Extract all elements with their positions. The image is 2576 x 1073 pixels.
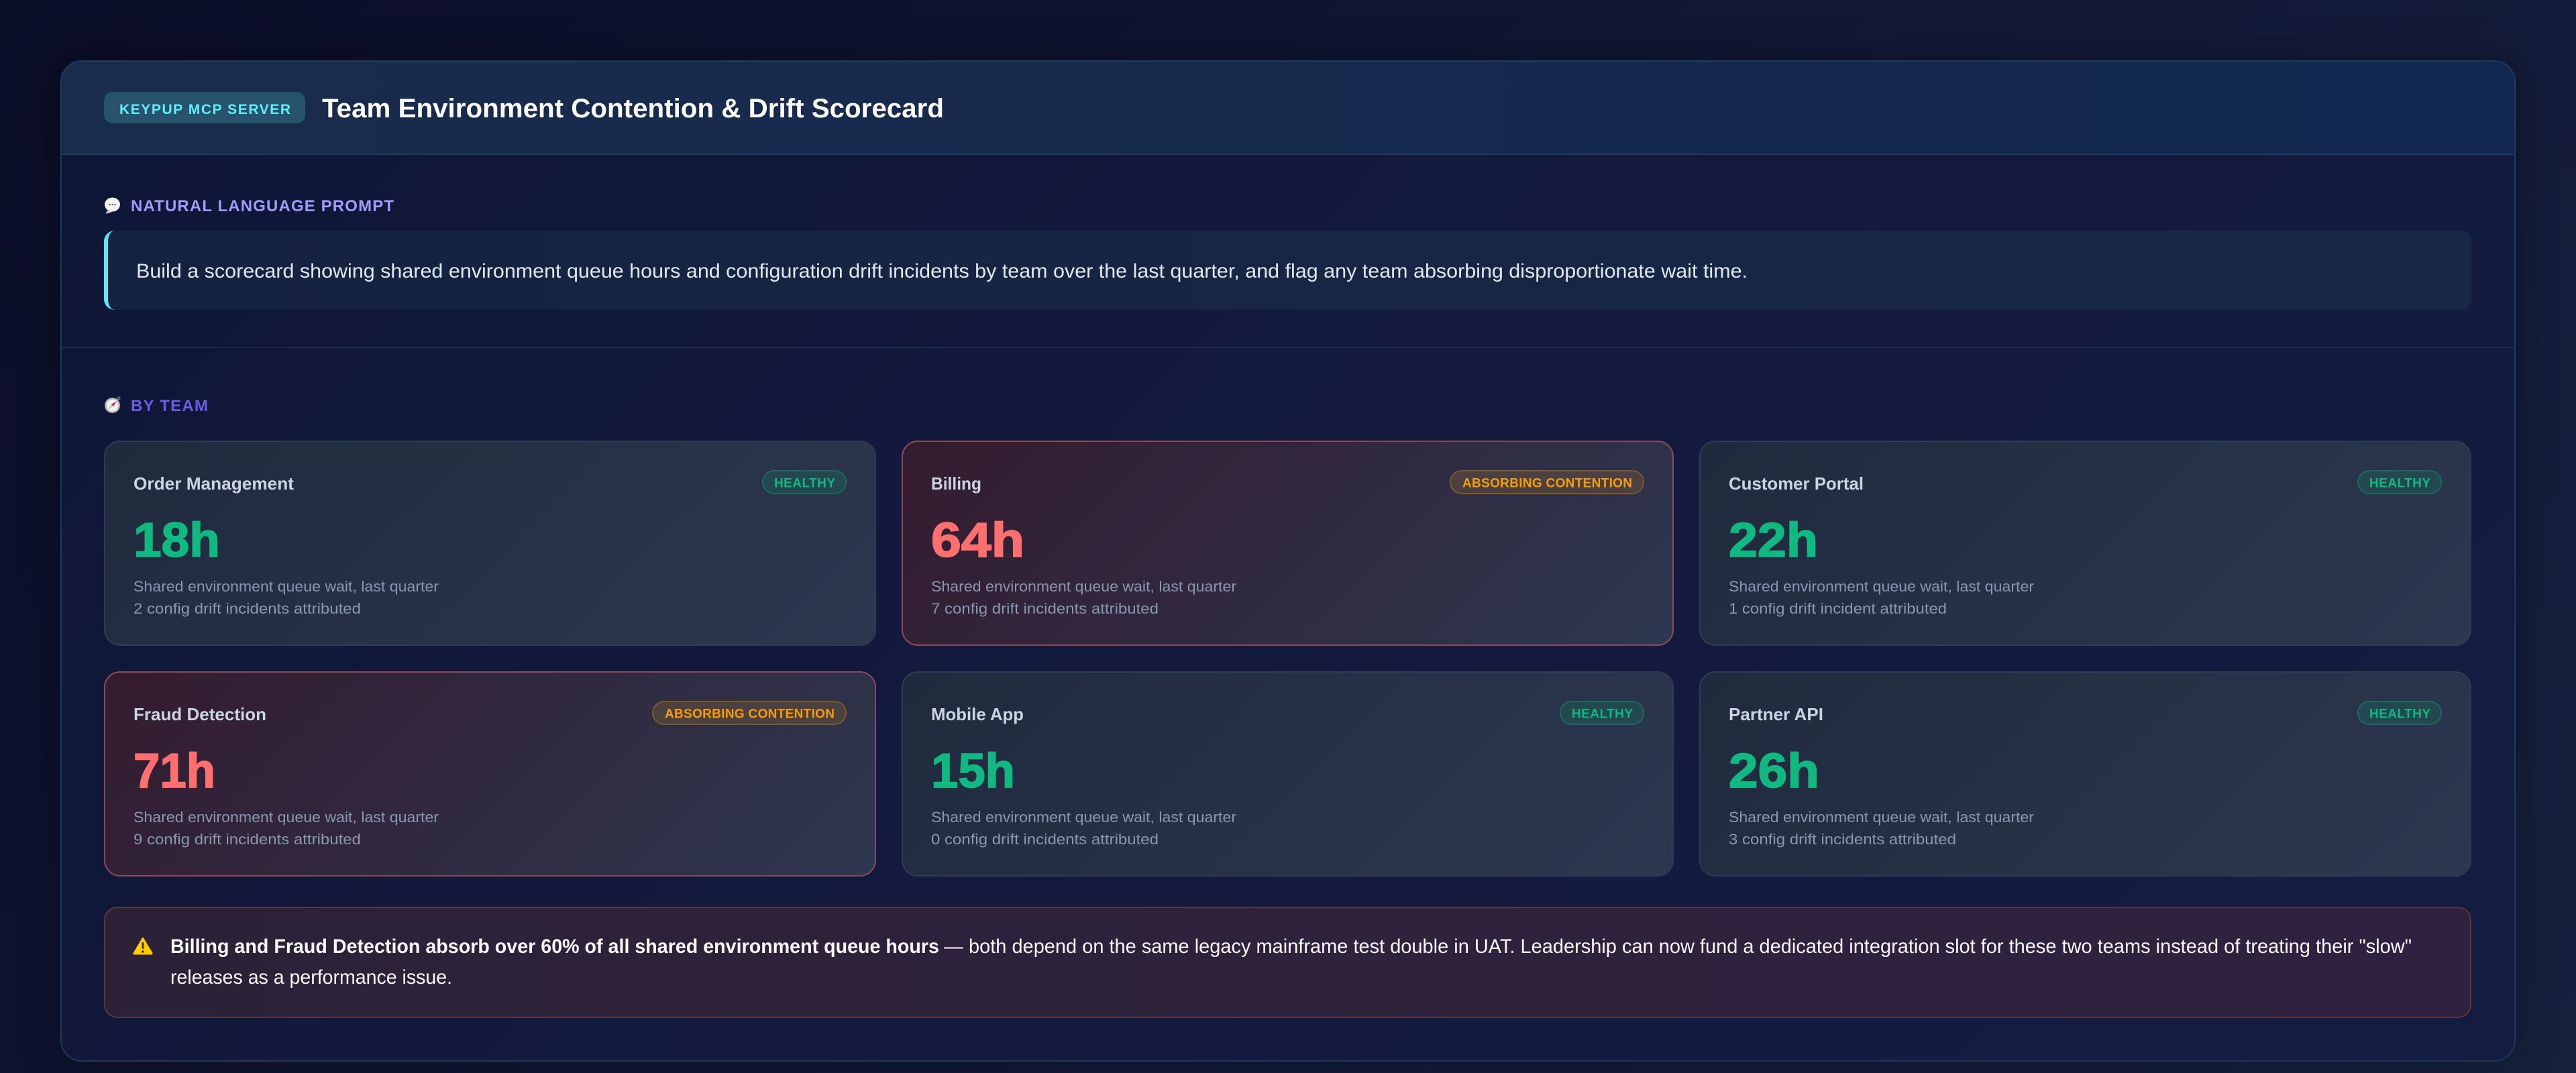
description: Shared environment queue wait, last quarter bbox=[1729, 809, 2034, 826]
description bbox=[133, 809, 439, 848]
team name: Fraud Detection bbox=[133, 704, 266, 724]
description: 2 config drift incidents attributed bbox=[133, 600, 361, 617]
status badge: ABSORBING CONTENTION bbox=[1462, 476, 1632, 491]
card: Fraud Detection bbox=[104, 671, 876, 877]
section label: natural language prompt bbox=[105, 197, 394, 215]
section label: by team bbox=[105, 397, 208, 415]
description bbox=[931, 809, 1236, 848]
card: Customer Portal bbox=[1699, 441, 2471, 646]
queue hours value: 71h bbox=[133, 744, 215, 798]
description: Shared environment queue wait, last quarter bbox=[931, 578, 1236, 595]
title: Team Environment Contention & Drift Scorecard bbox=[322, 94, 944, 123]
description bbox=[931, 578, 1236, 617]
status badge bbox=[653, 701, 846, 724]
status badge bbox=[1450, 471, 1644, 494]
prompt sentence: Build a scorecard showing shared environment queue hours and configuration drift incidents by team over the last quarter, and flag any team absorbing disproportionate wait time. bbox=[136, 260, 1748, 282]
team name: Partner API bbox=[1729, 704, 1823, 724]
queue hours value: 15h bbox=[931, 744, 1015, 798]
status badge: HEALTHY bbox=[774, 476, 835, 491]
team name: Billing bbox=[931, 473, 981, 494]
callout: insight bbox=[104, 907, 2471, 1018]
description bbox=[133, 578, 439, 617]
status badge: HEALTHY bbox=[1572, 707, 1633, 722]
panel: header bbox=[62, 62, 2514, 155]
queue hours value: 64h bbox=[931, 514, 1024, 567]
callout text: Billing and Fraud Detection absorb over 60% of all shared environment queue hours bbox=[170, 936, 939, 958]
panel: prompt text bbox=[104, 231, 2471, 310]
card: Mobile App bbox=[902, 671, 1674, 877]
description: Shared environment queue wait, last quarter bbox=[931, 809, 1236, 826]
status badge bbox=[2358, 471, 2441, 494]
status badge: ABSORBING CONTENTION bbox=[665, 707, 835, 722]
status badge bbox=[2358, 701, 2441, 724]
description: 3 config drift incidents attributed bbox=[1729, 831, 1956, 848]
status badge bbox=[763, 471, 846, 494]
status badge: HEALTHY bbox=[2369, 476, 2430, 491]
description: 0 config drift incidents attributed bbox=[931, 831, 1159, 848]
status badge: HEALTHY bbox=[2369, 707, 2430, 722]
description: Shared environment queue wait, last quarter bbox=[1729, 578, 2034, 595]
label text: NATURAL LANGUAGE PROMPT bbox=[131, 197, 394, 215]
description bbox=[1729, 809, 2034, 848]
callout text bbox=[170, 936, 2412, 989]
callout text: releases as a performance issue. bbox=[170, 966, 452, 989]
queue hours value: 22h bbox=[1729, 514, 1818, 567]
queue hours value: 18h bbox=[133, 514, 220, 567]
team name: Mobile App bbox=[931, 704, 1024, 724]
queue hours value: 26h bbox=[1729, 744, 1819, 798]
description: 9 config drift incidents attributed bbox=[133, 831, 361, 848]
description: Shared environment queue wait, last quarter bbox=[133, 578, 439, 595]
team name: Customer Portal bbox=[1729, 473, 1864, 494]
card: Partner API bbox=[1699, 671, 2471, 877]
icon: speech bubble bbox=[105, 197, 120, 213]
description: 7 config drift incidents attributed bbox=[931, 600, 1159, 617]
callout text: — both depend on the same legacy mainframe test double in UAT. Leadership can now fund a dedicated integration slot for these two teams instead of treating their "slow" bbox=[944, 936, 2412, 958]
card: Order Management bbox=[104, 441, 876, 646]
badge: Keypup MCP Server: KEYPUP MCP SERVER bbox=[119, 102, 290, 117]
badge: Keypup MCP Server bbox=[104, 92, 305, 123]
label text: BY TEAM bbox=[131, 397, 208, 415]
team name: Order Management bbox=[133, 473, 294, 494]
icon: warning triangle bbox=[133, 938, 153, 955]
description bbox=[1729, 578, 2034, 617]
description: Shared environment queue wait, last quarter bbox=[133, 809, 439, 826]
icon: compass bbox=[105, 397, 120, 413]
description: 1 config drift incident attributed bbox=[1729, 600, 1947, 617]
status badge bbox=[1560, 701, 1644, 724]
card: Billing bbox=[902, 441, 1674, 646]
